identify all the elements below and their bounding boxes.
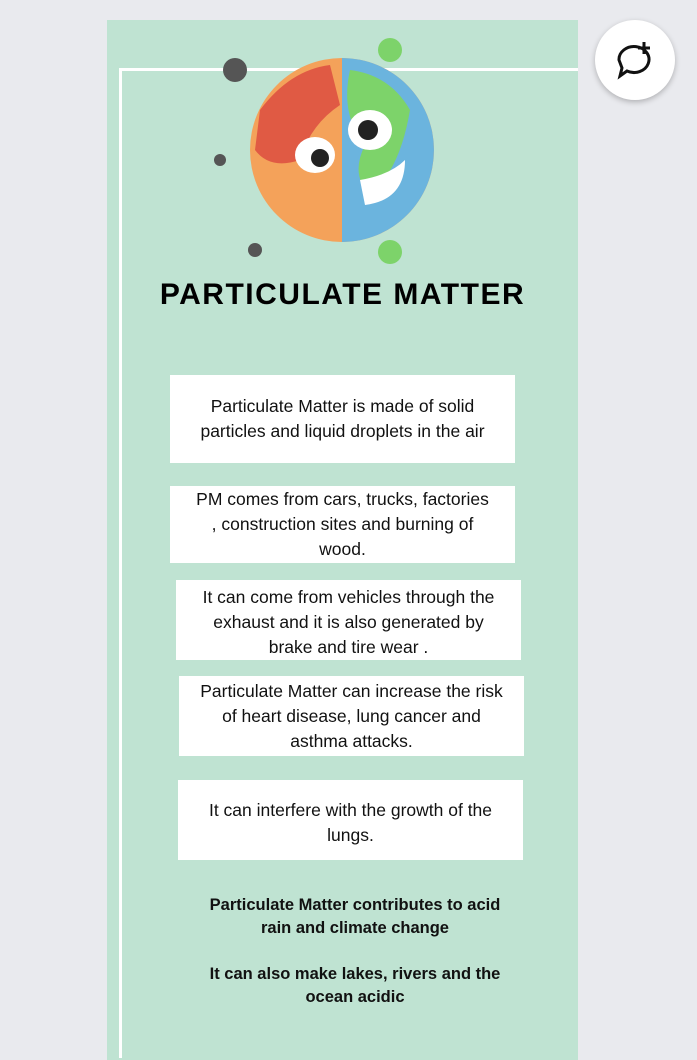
text box 5: It can interfere with the growth of the bbox=[209, 800, 492, 820]
bold text 1: rain and climate change bbox=[261, 919, 449, 937]
bold text 1: Particulate Matter contributes to acid bbox=[210, 896, 500, 914]
text box 4: Particulate Matter can increase the risk bbox=[200, 680, 503, 700]
text box 4: asthma attacks. bbox=[290, 730, 413, 750]
text box 4: of heart disease, lung cancer and bbox=[222, 706, 481, 726]
text box 3 bbox=[176, 580, 521, 660]
text box 3: exhaust and it is also generated by bbox=[213, 612, 484, 632]
bold text 1 bbox=[210, 896, 500, 937]
bold text 2: It can also make lakes, rivers and the bbox=[210, 965, 500, 983]
text box 5: lungs. bbox=[327, 825, 374, 845]
text box 4 bbox=[179, 676, 524, 756]
text box 1 bbox=[170, 375, 515, 463]
text box 2 bbox=[170, 486, 515, 563]
bold text 2: ocean acidic bbox=[305, 988, 405, 1006]
text box 3: brake and tire wear . bbox=[269, 636, 428, 656]
comment button bbox=[595, 20, 675, 100]
bold text 2 bbox=[210, 965, 500, 1006]
text box 2: PM comes from cars, trucks, factories bbox=[196, 489, 489, 509]
text box 5 bbox=[178, 780, 523, 860]
text box 3: It can come from vehicles through the bbox=[203, 586, 494, 606]
title: PARTICULATE MATTER bbox=[160, 278, 525, 311]
text box 1: particles and liquid droplets in the air bbox=[200, 421, 485, 441]
text box 2: , construction sites and burning of bbox=[212, 514, 473, 534]
icon: globe bbox=[214, 38, 434, 264]
text box 1: Particulate Matter is made of solid bbox=[211, 396, 474, 416]
text box 2: wood. bbox=[319, 539, 366, 559]
